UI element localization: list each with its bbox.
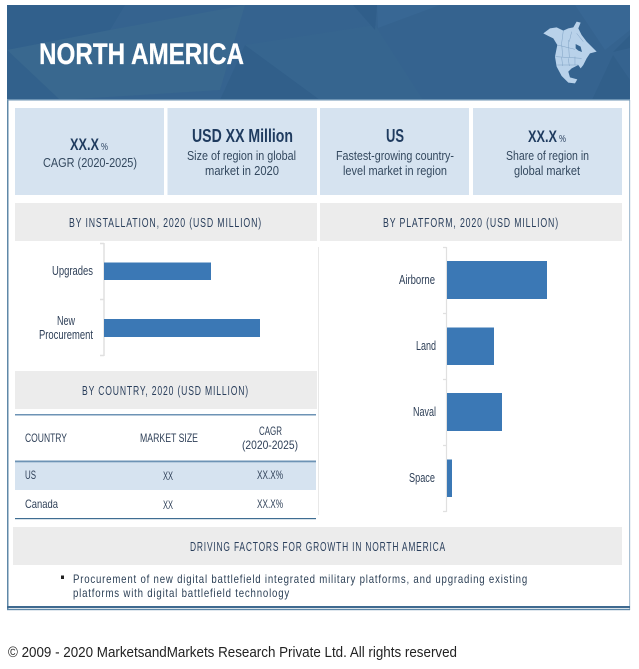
value: share: XX.X	[528, 127, 557, 146]
panel: size of region	[168, 108, 317, 195]
value: market size: USD XX Million	[192, 126, 293, 146]
table row: Canada	[25, 497, 283, 512]
bullet text: driving factor	[61, 572, 528, 600]
table row: US: XX.X%	[257, 468, 283, 482]
panel: CAGR	[15, 108, 164, 195]
bar: naval	[447, 393, 502, 431]
table row: US: XX	[163, 469, 173, 483]
label: new procurement: New	[57, 314, 76, 328]
outer frame	[7, 100, 630, 610]
heading: by installation: BY INSTALLATION, 2020 (USD MILLION)	[69, 216, 262, 230]
label: upgrades: Upgrades	[52, 264, 93, 278]
caption: share: Share of region in	[506, 148, 589, 163]
table row: Canada: Canada	[25, 497, 58, 511]
label: space: Space	[409, 471, 435, 485]
table header row: (2020-2025)	[242, 438, 298, 452]
bullet text: driving factor: Procurement of new digital battlefield integrated military platforms, and upgrading existing	[73, 572, 528, 586]
heading: by installation	[15, 203, 317, 241]
bar chart: by installation	[39, 243, 260, 356]
table row: Canada: XX	[163, 498, 173, 512]
caption: market size: market in 2020	[205, 163, 279, 178]
label: new procurement	[39, 314, 93, 342]
title: NORTH AMERICA	[39, 38, 244, 71]
table row: Canada: XX.X%	[257, 497, 283, 511]
heading: by platform: BY PLATFORM, 2020 (USD MILLION)	[383, 216, 559, 230]
bar: space	[447, 460, 452, 497]
bar: new procurement	[104, 319, 260, 337]
heading: driving factors: DRIVING FACTORS FOR GROWTH IN NORTH AMERICA	[190, 540, 446, 554]
heading: by platform	[320, 203, 622, 241]
value: CAGR: XX.X	[70, 135, 99, 154]
caption: market size	[187, 148, 296, 178]
table header row: COUNTRY	[25, 431, 67, 445]
caption: fastest growing: Fastest-growing country-	[336, 148, 454, 163]
table row: US: US	[25, 468, 36, 482]
panel: share of region	[473, 108, 622, 195]
bar: airborne	[447, 261, 547, 299]
bar chart: by platform	[399, 247, 547, 512]
table header row: CAGR	[259, 424, 282, 438]
caption: fastest growing	[336, 148, 454, 178]
table header row	[25, 424, 298, 452]
label: airborne: Airborne	[399, 273, 435, 287]
caption: share	[506, 148, 589, 178]
heading: by country: BY COUNTRY, 2020 (USD MILLION)	[82, 384, 249, 398]
label: land: Land	[416, 339, 436, 353]
caption: share: global market	[514, 163, 580, 178]
heading: driving factors	[13, 527, 622, 565]
bar: upgrades	[104, 262, 211, 280]
table header row: MARKET SIZE	[140, 431, 198, 445]
value: US: US	[386, 126, 404, 146]
caption: market size: Size of region in global	[187, 148, 296, 163]
label: naval: Naval	[413, 405, 436, 419]
heading: by country	[15, 371, 317, 409]
header banner	[7, 5, 630, 100]
caption: CAGR: CAGR (2020-2025)	[43, 155, 137, 170]
table: by country	[15, 414, 316, 519]
bullet text: driving factor: platforms with digital battlefield technology	[73, 586, 290, 600]
bar: land	[447, 328, 494, 365]
unit: percent: %	[101, 142, 108, 153]
icon: north america map	[543, 22, 597, 83]
footer copyright: © 2009 - 2020 MarketsandMarkets Research Private Ltd. All rights reserved	[8, 645, 457, 661]
panel: fastest growing	[320, 108, 469, 195]
table row: US	[25, 468, 283, 483]
caption: fastest growing: level market in region	[343, 163, 447, 178]
unit: share percent: %	[559, 134, 566, 145]
label: new procurement: Procurement	[39, 328, 93, 342]
